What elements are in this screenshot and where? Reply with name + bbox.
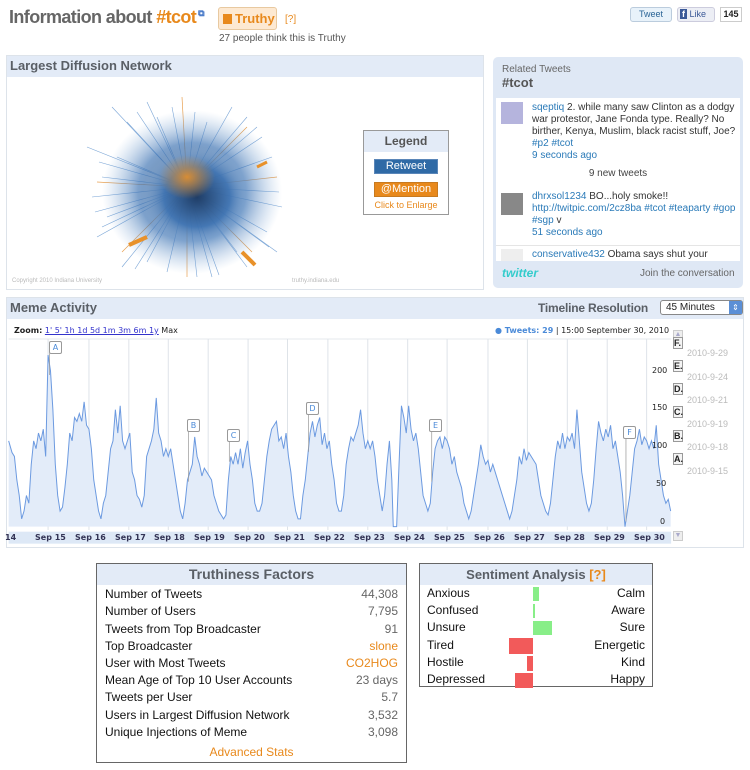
legend: Click to Enlarge: [374, 200, 438, 210]
tweet list: conservative432 Obama says shut your: [532, 249, 708, 260]
chart annotations and axes: B: [191, 421, 196, 430]
event list: C.: [674, 407, 683, 417]
event list: F.: [674, 338, 681, 348]
panel: sentiment analysis: Calm: [617, 586, 645, 600]
panel: meme activity: [6, 297, 744, 548]
chart annotations and axes: Sep 19: [194, 533, 225, 542]
current value: ● Tweets: 29 | 15:00 September 30, 2010: [495, 326, 669, 335]
timeline resolution: Timeline Resolution: [538, 301, 648, 315]
panel: sentiment analysis: Kind: [621, 655, 645, 669]
truthy button: [218, 7, 277, 30]
chart annotations and axes: Sep 18: [154, 533, 185, 542]
chart annotations and axes: 200: [652, 366, 667, 375]
event list: E.: [674, 361, 683, 371]
chart annotations and axes: A: [53, 343, 58, 352]
panel: sentiment analysis: Energetic: [594, 638, 645, 652]
tweet list: 9 new tweets: [589, 168, 647, 179]
panel: truthiness factors: 3,532: [368, 708, 398, 722]
tweet list: [496, 98, 740, 261]
panel: truthiness factors: CO2HOG: [346, 656, 398, 670]
panel: truthiness factors: Tweets from Top Broadcaster: [105, 622, 261, 636]
chart annotations and axes: 100: [652, 441, 667, 450]
chart annotations and axes: Sep 27: [514, 533, 545, 542]
line chart: [8, 338, 672, 544]
chart annotations and axes: Sep 17: [115, 533, 146, 542]
title: Information about #tcot ⧉: [9, 7, 204, 27]
chart annotations and axes: 14: [5, 533, 16, 542]
chart annotations and axes: Sep 23: [354, 533, 385, 542]
chart annotations and axes: Sep 26: [474, 533, 505, 542]
panel: truthiness factors: 7,795: [368, 604, 398, 618]
panel: sentiment analysis: Confused: [427, 603, 478, 617]
heading: Largest Diffusion Network: [10, 58, 172, 73]
chart annotations and axes: C: [231, 431, 236, 440]
chart annotations and axes: D: [309, 404, 316, 413]
chart annotations and axes: [5, 341, 667, 542]
panel: truthiness factors: 91: [385, 622, 398, 636]
panel: related tweets: [493, 57, 743, 288]
panel: truthiness factors: Number of Tweets: [105, 587, 202, 601]
share buttons: Tweet: [639, 9, 663, 19]
panel: truthiness factors: User with Most Tweets: [105, 656, 225, 670]
panel: truthiness factors: 5.7: [381, 690, 398, 704]
truthy button: Truthy: [235, 11, 275, 26]
panel: sentiment analysis: Depressed: [427, 672, 485, 686]
panel: related tweets: Join the conversation: [640, 268, 735, 279]
panel: sentiment analysis: Tired: [427, 638, 454, 652]
event list: A.: [674, 454, 683, 464]
panel: meme activity: ⇕: [732, 303, 739, 312]
legend: Retweet: [386, 160, 426, 172]
heading: Sentiment Analysis [?]: [466, 567, 606, 582]
panel: truthiness factors: slone: [369, 639, 398, 653]
event list: ▲: [675, 331, 681, 338]
network graph: truthy.indiana.edu: [292, 278, 339, 284]
heading: Meme Activity: [10, 300, 97, 315]
truthy count: 27 people think this is Truthy: [219, 33, 346, 44]
chart annotations and axes: Sep 20: [234, 533, 265, 542]
heading: [420, 564, 652, 585]
event list: 2010-9-29: [687, 348, 728, 358]
panel: truthiness factors: [96, 563, 407, 763]
tweet list: 9 seconds ago: [532, 150, 597, 161]
event list: [673, 330, 728, 541]
legend: @Mention: [381, 183, 431, 195]
tweet list: sqeptiq 2. while many saw Clinton as a dodgy war protestor, Jane Fonda type. Really? No birther, Kenya, Muslim, black racist stuff, Joe? #p2 #tcot: [532, 102, 735, 149]
panel: truthiness factors: 3,098: [368, 725, 398, 739]
chart annotations and axes: 150: [652, 403, 667, 412]
chart annotations and axes: Sep 30: [634, 533, 665, 542]
chart annotations and axes: Sep 16: [75, 533, 106, 542]
share buttons: f Like: [682, 9, 706, 19]
event list: ▼: [675, 532, 681, 539]
heading: [97, 564, 406, 585]
chart annotations and axes: 50: [656, 479, 666, 488]
event list: D.: [674, 384, 683, 394]
chart annotations and axes: Sep 29: [594, 533, 625, 542]
panel: sentiment analysis: Sure: [620, 620, 645, 634]
event list: B.: [674, 431, 683, 441]
share buttons: 145: [723, 9, 739, 19]
tweet list: dhrxsol1234 BO...holy smoke!! http://twitpic.com/2cz8ba #tcot #teaparty #gop #sgp v: [532, 191, 735, 226]
panel: sentiment analysis: Unsure: [427, 620, 466, 634]
panel: truthiness factors: Number of Users: [105, 604, 196, 618]
panel: truthiness factors: Users in Largest Diffusion Network: [105, 708, 290, 722]
chart annotations and axes: Sep 15: [35, 533, 66, 542]
panel: sentiment analysis: Happy: [610, 672, 645, 686]
tweet list: 51 seconds ago: [532, 227, 603, 238]
event list: 2010-9-18: [687, 442, 728, 452]
share buttons: [630, 7, 742, 22]
panel: sentiment analysis: Anxious: [427, 586, 470, 600]
panel: truthiness factors: Unique Injections of Meme: [105, 725, 247, 739]
legend: [363, 130, 449, 215]
network graph: Copyright 2010 Indiana University: [12, 278, 102, 284]
panel: truthiness factors: Mean Age of Top 10 User Accounts: [105, 673, 292, 687]
event list: 2010-9-24: [687, 372, 728, 382]
chart annotations and axes: F: [627, 428, 632, 437]
chart annotations and axes: Sep 25: [434, 533, 465, 542]
heading: [7, 298, 743, 319]
help link: [?]: [285, 14, 296, 25]
sentiment bars: [509, 587, 552, 688]
panel: sentiment analysis: [419, 563, 653, 687]
event list: 2010-9-19: [687, 419, 728, 429]
panel: sentiment analysis: Aware: [611, 603, 645, 617]
panel: related tweets: twitter: [502, 266, 538, 280]
panel: related tweets: Related Tweets: [502, 64, 571, 75]
panel: sentiment analysis: Hostile: [427, 655, 464, 669]
panel: related tweets: #tcot: [502, 75, 533, 90]
event list: 2010-9-15: [687, 466, 728, 476]
zoom links: Zoom: 1' 5' 1h 1d 5d 1m 3m 6m 1y Max: [14, 326, 178, 335]
chart annotations and axes: E: [433, 421, 438, 430]
chart annotations and axes: 0: [660, 517, 665, 526]
heading: Truthiness Factors: [189, 566, 314, 582]
chart annotations and axes: Sep 28: [554, 533, 585, 542]
panel: truthiness factors: Tweets per User: [105, 690, 192, 704]
panel: meme activity: 45 Minutes: [666, 302, 715, 313]
panel: truthiness factors: Advanced Stats: [209, 745, 294, 759]
chart annotations and axes: Sep 21: [274, 533, 305, 542]
chart annotations and axes: Sep 24: [394, 533, 425, 542]
panel: truthiness factors: Top Broadcaster: [105, 639, 192, 653]
panel: truthiness factors: 23 days: [356, 673, 398, 687]
panel: diffusion network: [6, 55, 484, 290]
legend: Legend: [385, 134, 427, 148]
event list: 2010-9-21: [687, 395, 728, 405]
panel: truthiness factors: 44,308: [361, 587, 398, 601]
heading: [7, 56, 483, 77]
chart annotations and axes: Sep 22: [314, 533, 345, 542]
network graph: [12, 97, 339, 284]
